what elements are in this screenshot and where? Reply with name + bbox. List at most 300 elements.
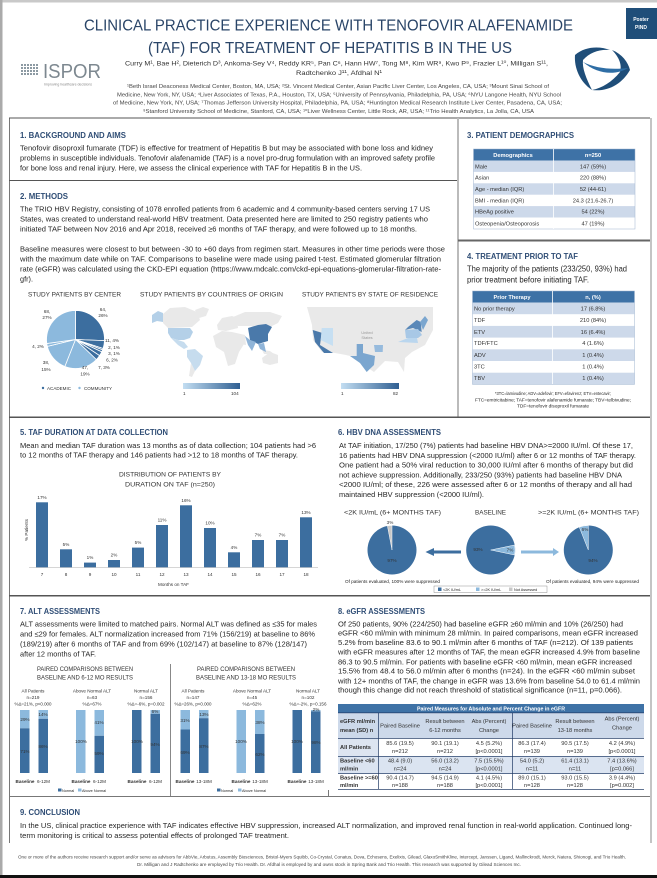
bar chart: baseline vs 6-12 months: PAIRED COMPARISONS BETWEEN (37, 666, 133, 673)
table: prior therapy: 1 (0.4%) (582, 364, 604, 370)
arrow: to right pie (521, 548, 559, 556)
authors: Radtchenko J¹¹, Afdhal N¹ (296, 70, 383, 77)
heading: 4. TREATMENT PRIOR TO TAF (467, 251, 578, 261)
bar chart: baseline vs 13-18 months: Normal ALT (296, 688, 320, 694)
table: paired eGFR measures: Abs (Percent) (472, 719, 506, 725)
pie chart: patients by center: 2, 1% (108, 345, 120, 350)
table: paired eGFR measures: [p=0.002] (610, 783, 634, 789)
bar chart: baseline vs 6-12 months: 6-12M (37, 779, 50, 784)
heading: 2. METHODS (20, 191, 68, 201)
table: paired eGFR measures: 54.0 (5.2) (520, 758, 544, 764)
affiliations: ⁹Stanford University School of Medicine, Stanford, CA, USA; ¹⁰Liver Wellness Center, Little Rock, AR, USA; ¹¹Trio Health Analytics, La Jolla, CA, USA (143, 108, 535, 115)
table: paired eGFR measures: 93.0 (15.5) (561, 776, 589, 782)
bar chart: baseline vs 6-12 months: 41% (94, 720, 104, 725)
pie chart: baseline: 7% (507, 548, 513, 552)
table: paired eGFR measures: n=11 (569, 766, 581, 772)
bar chart: baseline vs 13-18 months: 2% (313, 707, 319, 712)
bar chart: baseline vs 13-18 months: 100% (235, 739, 247, 744)
bar chart: baseline vs 13-18 months: 13-18M (196, 779, 212, 784)
map: state of residence: United (361, 330, 373, 335)
table: paired eGFR measures: 7.4 (13.6%) (607, 758, 637, 764)
text block: for bone loss and renal injury. Here, we assess the clinical experience with TAF for Hepatitis B in the US. (20, 164, 362, 172)
footnote (475, 391, 631, 408)
table: paired eGFR measures (338, 704, 644, 790)
bar chart: distribution by duration: 11 (136, 572, 141, 577)
pie chart: patients by center: 38, (43, 360, 49, 365)
table: paired eGFR measures: ml/min (340, 766, 359, 772)
pie chart: patients by center: 64, (100, 307, 106, 312)
affiliations (113, 84, 562, 115)
table: demographics: Asian (475, 176, 489, 182)
bar chart: baseline vs 13-18 months: %Δ=62% (242, 702, 262, 706)
map: state of residence: States (361, 335, 373, 340)
pie chart: baseline: BASELINE (475, 510, 506, 516)
table: paired eGFR measures: [p<0.0001] (608, 749, 636, 755)
table: demographics: Male (475, 164, 487, 170)
table: prior therapy: ETV (474, 330, 485, 336)
table: paired eGFR measures: n=188 (437, 783, 453, 789)
bar chart: distribution by duration: 10 (111, 572, 117, 577)
heading: 6. HBV DNA ASSESSMENTS (338, 427, 441, 437)
text block: maintained HBV suppression (<2000 IU/ml). (339, 490, 484, 499)
text block: Mean and median TAF duration was 13 months as of data collection; 104 patients had >6 (20, 441, 316, 450)
bar chart: baseline vs 13-18 months: Baseline (288, 779, 307, 784)
panel: eGFR assessments (337, 606, 644, 790)
pie chart: patients by center: 15% (41, 367, 51, 372)
map: state of residence: STUDY PATIENTS BY STATE OF RESIDENCE (302, 292, 438, 298)
bar chart: distribution by duration: 10% (205, 520, 215, 526)
bar chart: distribution by duration (24, 472, 318, 587)
text block: eGFR <60 ml/min with minimum 28 ml/min. In paired comparisons, mean eGFR increased (338, 628, 638, 638)
table: demographics: 47 (19%) (581, 222, 605, 228)
authors (125, 60, 548, 77)
pie chart: patients by center: 27% (42, 315, 52, 320)
pie chart: 2K or more after 6+ months (538, 510, 640, 584)
table: paired eGFR measures: n=188 (392, 783, 408, 789)
bar chart: distribution by duration: 7 (41, 572, 44, 577)
bar chart: baseline vs 13-18 months: Above Normal (242, 789, 266, 793)
bar chart: baseline vs 6-12 months: n=156 (140, 695, 153, 700)
table: demographics: 52 (44-61) (580, 187, 606, 193)
pie chart: patients by center: 11, 4% (105, 338, 119, 343)
pie chart: patients by center: 26% (98, 313, 108, 318)
footnote: TDF=tenofovir disoproxil fumarate (517, 404, 590, 408)
pie chart: patients by center (28, 292, 121, 391)
pie chart: 2K or more after 6+ months: >=2K IU/mL (6+ MONTHS TAF) (538, 510, 639, 516)
text block: problems in susceptible individuals. Tenofovir alafenamide (TAF) is a novel pro-drug formulation with an improved safety profile (20, 154, 435, 162)
map: countries of origin: STUDY PATIENTS BY COUNTRIES OF ORIGIN (140, 292, 283, 298)
bar chart: distribution by duration: 13 (183, 572, 189, 577)
icon: ISPOR logo: ISPOR (43, 61, 101, 83)
text block (467, 264, 627, 284)
text block: At TAF initiation, 17/250 (7%) patients had baseline HBV DNA>=2000 IU/ml. Of these 17, (339, 441, 633, 450)
bar chart: baseline vs 13-18 months: All Patients (182, 688, 205, 694)
bar chart: baseline vs 6-12 months: 14% (38, 712, 48, 717)
footer disclosures: One or more of the authors receive research support and/or serve as advisors for AbbVie, Arbutus, Assembly Biosciences, Bristol-Myers Squibb, Co-Crystal, Conatus, Dova, Echosens, Exelixis, Gilead, GlaxoSmithKline, Intercept, Janssen, Ligand, Mallinckrodt, Merck, Natera, Shionogi, and Trio Health. (18, 854, 626, 860)
text block: Baseline measures were closest to but between -30 to +60 days from regimen start. Measures in other time periods were those (20, 244, 445, 254)
text block (20, 821, 633, 840)
table: paired eGFR measures: 94.5 (14.9) (431, 776, 459, 782)
panel: ALT assessments (14, 606, 327, 793)
bar chart: baseline vs 6-12 months: Baseline (16, 779, 35, 784)
table: paired eGFR measures: Baseline >=60 (340, 776, 378, 782)
panel: conclusion (20, 807, 633, 840)
table: paired eGFR measures: n=139 (524, 749, 540, 755)
table: paired eGFR measures: 7.5 (15.5%) (474, 758, 504, 764)
bar chart: baseline vs 13-18 months: PAIRED COMPARISONS BETWEEN (197, 666, 295, 673)
bar chart: baseline vs 13-18 months: BASELINE AND 13-18 MO RESULTS (196, 674, 296, 682)
affiliations: Medicine, New York, NY, USA; ⁴Liver Associates of Texas, P.A., Houston, TX, USA; ⁵University of Pennsylvania, Philadelphia, PA, USA; ⁶NYU Langone Health, NYU School (117, 92, 561, 98)
table: paired eGFR measures: 3.9 (4.4%) (609, 776, 635, 782)
table: paired eGFR measures: 4.5 (5.2%) (476, 741, 502, 747)
bar chart: distribution by duration: Months on TAF (158, 582, 189, 587)
text block: with the maximum date while on TAF. Comparisons to baseline were made using paired t-test. Estimated glomerular filtration (19, 254, 441, 264)
bar chart: baseline vs 6-12 months: 6% (152, 709, 158, 714)
table: demographics: 54 (22%) (581, 210, 605, 216)
panel: background and aims (20, 130, 435, 172)
footer disclosures (18, 854, 626, 867)
map: state of residence: 1 (341, 391, 344, 396)
bar chart: baseline vs 13-18 months: n=147 (187, 695, 200, 700)
text block: 86.3 to 90.5 ml/min. For patients with baseline eGFR <60 ml/min, mean eGFR increased (338, 658, 632, 666)
bar chart: distribution by duration: 17% (37, 495, 47, 500)
map: countries of origin (140, 292, 283, 396)
bar chart: baseline vs 13-18 months: Baseline (232, 779, 251, 784)
bar chart: baseline vs 13-18 months: Normal (221, 789, 233, 793)
text block (20, 144, 435, 172)
pie chart: 2K or more after 6+ months: 6% (582, 527, 588, 532)
bar chart: distribution by duration: % Patients (24, 518, 29, 541)
table: demographics: Age - median (IQR) (475, 187, 524, 193)
table: prior therapy: 210 (84%) (580, 318, 606, 324)
table: paired eGFR measures: n=128 (567, 783, 583, 789)
bar chart: baseline vs 6-12 months: Normal (62, 789, 74, 793)
text block: 15.5% from 48.4 to 56.0 ml/min after 6 months (n=24). In the eGFR <60 ml/min subset (338, 666, 635, 676)
bar chart: distribution by duration: 16 (255, 572, 261, 577)
text block: ALT assessments were limited to matched pairs. Normal ALT was defined as ≤35 for males (20, 620, 317, 628)
bar chart: baseline vs 6-12 months: Baseline (128, 779, 147, 784)
table: paired eGFR measures: Paired Baseline (512, 724, 552, 730)
bar chart: distribution by duration: 18 (303, 572, 309, 577)
bar chart: distribution by duration: 12 (159, 572, 165, 577)
map: state of residence (302, 292, 438, 396)
table: paired eGFR measures: [p<0.0001] (475, 783, 503, 789)
table: paired eGFR measures: Paired Measures for Absolute and Percent Change in eGFR (417, 706, 565, 712)
text block: In the US, clinical practice experience with TAF indicates effective HBV suppression, increased ALT normalization, and improved renal function in real-world application. Continued long- (20, 821, 633, 830)
table: prior therapy: 3TC (474, 364, 485, 370)
table: paired eGFR measures: Change (479, 728, 499, 734)
title: (TAF) FOR TREATMENT OF HEPATITIS B IN THE US (148, 40, 512, 57)
title (84, 18, 573, 57)
table: paired eGFR measures: 90.5 (17.5) (561, 741, 589, 747)
table: paired eGFR measures: 89.0 (15.1) (518, 776, 546, 782)
bar chart: baseline vs 13-18 months: %Δ=26%, p<0.000 (174, 702, 212, 706)
table: paired eGFR measures: Result between (425, 719, 465, 725)
table: paired eGFR measures: 85.6 (19.5) (386, 741, 414, 747)
poster badge (626, 8, 657, 39)
footnote: FTC=emtricitabine; TAF=tenofovir alafenamide fumarate; TBV=telbivudine; (475, 398, 631, 402)
text block: 16 patients had HBV DNA suppression (<2000 IU/ml) after 6 or 12 months of TAF therapy. (339, 451, 636, 460)
bar chart: distribution by duration: DISTRIBUTION OF PATIENTS BY (119, 472, 221, 478)
pie chart: patients by center: 7, 3% (98, 365, 110, 370)
bar chart: baseline vs 6-12 months: 100% (131, 739, 143, 744)
table: demographics: 24.3 (21.6-26.7) (573, 198, 613, 204)
poster badge: PIND (635, 25, 647, 31)
table: paired eGFR measures: Change (612, 726, 632, 732)
bar chart: baseline vs 6-12 months: Above Normal (82, 789, 106, 793)
text block (337, 620, 640, 694)
table: prior therapy: 4 (1.6%) (582, 341, 604, 347)
bar chart: baseline vs 6-12 months: %Δ=67% (82, 702, 102, 706)
bar chart: distribution by duration: 16% (181, 498, 191, 503)
text block: after 12 months of TAF. (20, 650, 96, 658)
legend (434, 586, 547, 592)
text block: term monitoring is critical to assess potential effects of prolonged TAF treatment. (20, 831, 289, 840)
bar chart: baseline vs 6-12 months: 29% (20, 717, 30, 722)
bar chart: distribution by duration: 11% (158, 518, 166, 522)
table: prior therapy: 1 (0.4%) (582, 353, 604, 359)
table: paired eGFR measures: n=24 (439, 766, 451, 772)
legend: Not Assessed (514, 588, 537, 592)
bar chart: distribution by duration: 15 (231, 572, 237, 577)
pie chart: patients by center: 4, 2% (32, 344, 44, 349)
pie chart: patients by center: COMMUNITY (84, 386, 112, 391)
text block: gfr). (20, 274, 33, 284)
heading: 8. eGFR ASSESSMENTS (338, 606, 425, 616)
table: paired eGFR measures: 86.3 (17.4) (518, 741, 546, 747)
bar chart: baseline vs 13-18 months: Above Normal ALT (233, 688, 271, 694)
bar chart: distribution by duration: 17 (279, 572, 285, 577)
bar chart: baseline vs 13-18 months: 13% (199, 712, 209, 717)
table: paired eGFR measures: eGFR ml/min (340, 719, 376, 725)
table: prior therapy: n, (%) (585, 295, 601, 301)
map: state of residence: 82 (393, 391, 399, 396)
pie chart: patients by center: 47, (82, 365, 88, 370)
bar chart: baseline vs 6-12 months: 6-12M (149, 779, 162, 784)
pie chart: 2K or more after 6+ months: Of patients evaluated, 94% were suppressed (546, 579, 640, 584)
text block: prior treatment before initiating TAF. (467, 276, 589, 284)
pie chart: under 2K after 6+ months (344, 510, 441, 584)
text block: States, was created to understand real-world HBV treatment. Data presented here are limited to 250 registry patients who (20, 214, 428, 224)
text block: The TRIO HBV Registry, consisting of 1078 enrolled patients from 6 academic and 4 community-based centers serving 17 US (20, 204, 430, 214)
table: paired eGFR measures: 61.4 (13.1) (561, 758, 589, 764)
bar chart: baseline vs 6-12 months: %Δ=21%, p<0.000 (14, 702, 52, 706)
bar chart: distribution by duration: 8 (65, 572, 68, 577)
heading: 9. CONCLUSION (20, 807, 80, 817)
table: paired eGFR measures: 48.4 (9.0) (388, 758, 412, 764)
text block: <2000 IU/ml; of these, 226 were assessed after 6 or 12 months of therapy and all had (339, 480, 632, 489)
bar chart: baseline vs 13-18 months: 100% (291, 739, 303, 744)
text block (20, 620, 317, 658)
bar chart: baseline vs 13-18 months: Baseline (176, 779, 195, 784)
bar chart: baseline vs 6-12 months (14, 666, 165, 793)
heading: 1. BACKGROUND AND AIMS (20, 130, 126, 140)
bar chart: distribution by duration: DURATION ON TAF (n=250) (125, 482, 215, 488)
panel: treatment prior to TAF (467, 251, 634, 408)
panel: TAF duration (20, 427, 318, 587)
table: demographics: 147 (59%) (580, 164, 606, 170)
table: paired eGFR measures: [p=0.066] (610, 766, 634, 772)
icon: ISPOR logo: Improving healthcare decisions (44, 82, 92, 86)
legend: >=2K IU/mL (481, 588, 501, 592)
bar chart: baseline vs 6-12 months: 100% (75, 739, 87, 744)
bar chart: distribution by duration: 13% (301, 510, 311, 515)
icon: swoosh logo (575, 47, 630, 90)
bar chart: baseline vs 6-12 months: Above Normal ALT (73, 688, 111, 694)
table: paired eGFR measures: 4.1 (4.5%) (476, 776, 502, 782)
bar chart: distribution by duration: 7% (279, 532, 285, 538)
pie chart: patients by center: STUDY PATIENTS BY CENTER (28, 292, 121, 298)
heading: 7. ALT ASSESSMENTS (20, 606, 100, 616)
table: prior therapy: Prior Therapy (494, 295, 531, 301)
bar chart: baseline vs 6-12 months: n=219 (27, 695, 40, 700)
pie chart: under 2K after 6+ months: 97% (387, 558, 397, 563)
pie chart: under 2K after 6+ months: 3% (387, 520, 393, 525)
table: paired eGFR measures: n=24 (394, 766, 406, 772)
bar chart: baseline vs 13-18 months: 38% (255, 720, 265, 725)
table: prior therapy: TBV (474, 376, 485, 382)
bar chart: baseline vs 13-18 months (174, 666, 327, 793)
table: paired eGFR measures: Result between (555, 719, 595, 725)
text block: not achieve suppression. Additionally, 233/250 (93%) patients had baseline HBV DNA (339, 470, 622, 480)
text block: with 12+ months of TAF, the change in eGFR was 13.6% from baseline 54.0 to 61.4 ml/min (337, 676, 640, 686)
bar chart: baseline vs 13-18 months: 87% (199, 744, 209, 749)
text block: with eGFR measures after 12 months of TAF, the mean eGFR increased 4.9% from baseline (337, 648, 640, 656)
bar chart: baseline vs 13-18 months: 13-18M (308, 779, 324, 784)
table: paired eGFR measures: n=212 (392, 749, 408, 755)
table: prior therapy: No prior therapy (474, 306, 515, 312)
bar chart: baseline vs 6-12 months: 59% (94, 751, 104, 756)
bar chart: distribution by duration: 1% (87, 555, 93, 560)
table: demographics: HBeAg positive (475, 210, 514, 216)
text block: rate (eGFR) was calculated using the CKD-EPI equation (https://www.mdcalc.com/ckd-epi-equations-glomerular-filtration-rate- (20, 264, 442, 274)
pie chart: baseline: 93% (473, 547, 483, 552)
bar chart: baseline vs 6-12 months: n=63 (87, 695, 98, 700)
bar chart: baseline vs 13-18 months: 62% (255, 752, 265, 757)
pie chart: patients by center: 68, (44, 309, 50, 314)
authors: Curry M¹, Bae H², Dieterich D³, Ankoma-Sey V⁴, Reddy KR⁵, Pan C⁶, Hann HW⁷, Tong M⁸, Kim WR⁹, Kwo P⁹, Frazier L¹⁰, Milligan S¹¹, (125, 60, 548, 68)
footnote: *3TC=lamivudine; ADV=adefovir; EFV=efavirenz; ETV=entecavir; (495, 391, 611, 396)
pie chart: patients by center: 19% (80, 372, 90, 376)
table: prior therapy: TDF (474, 318, 486, 324)
heading: 5. TAF DURATION AT DATA COLLECTION (20, 427, 168, 437)
pie chart: patients by center: 6, 2% (106, 358, 118, 362)
table: demographics: n=250 (585, 153, 601, 159)
bar chart: baseline vs 6-12 months: 94% (150, 742, 160, 747)
table: paired eGFR measures: 56.0 (13.2) (431, 758, 459, 764)
text block (339, 441, 636, 499)
table: prior therapy (472, 291, 634, 384)
bar chart: distribution by duration: 4% (231, 545, 237, 550)
map: countries of origin: 1 (183, 391, 186, 396)
bar chart: baseline vs 13-18 months: %Δ=-2%, p=0.156 (290, 702, 327, 706)
affiliations: of Medicine, New York, NY, USA; ⁷Thomas Jefferson University Hospital, Philadelphia, PA, USA; ⁸Huntington Medical Research Institute Liver Center, Pasadena, CA, USA; (113, 100, 562, 106)
panel: HBV DNA assessments (338, 427, 640, 592)
header (21, 8, 657, 115)
table: demographics (474, 149, 635, 229)
table: paired eGFR measures: 90.4 (14.7) (386, 776, 414, 782)
table: paired eGFR measures: 13-18 months (558, 728, 593, 734)
bar chart: baseline vs 13-18 months: 13-18M (252, 779, 268, 784)
table: paired eGFR measures: Abs (Percent) (605, 716, 639, 722)
table: demographics: Demographics (493, 153, 533, 159)
poster badge: Poster (633, 17, 649, 23)
pie chart: under 2K after 6+ months: <2K IU/mL (6+ MONTHS TAF) (344, 510, 441, 516)
bar chart: baseline vs 6-12 months: 6-12M (93, 779, 106, 784)
text block: The majority of the patients (233/250, 93%) had (467, 264, 627, 274)
pie chart: 2K or more after 6+ months: 94% (588, 558, 598, 563)
text block: Tenofovir disoproxil fumarate (TDF) is effective for treatment of Hepatitis B but may be associated with bone loss and kidney (20, 144, 433, 152)
table: paired eGFR measures: n=139 (567, 749, 583, 755)
table: paired eGFR measures: n=11 (526, 766, 538, 772)
table: paired eGFR measures: All Patients (340, 745, 371, 751)
text block: to 12 months of TAF therapy and 146 patients had >12 to 18 months of TAF therapy. (20, 450, 298, 460)
map: countries of origin: 104 (231, 391, 239, 396)
table: paired eGFR measures: Baseline <60 (340, 758, 375, 764)
panel: methods (19, 191, 445, 396)
pie chart: baseline (466, 510, 515, 574)
table: prior therapy: 1 (0.4%) (582, 376, 604, 382)
table: paired eGFR measures: n=212 (437, 749, 453, 755)
pie chart: under 2K after 6+ months: Of patients evaluated, 100% were suppressed (345, 579, 441, 584)
bar chart: baseline vs 13-18 months: 69% (180, 750, 190, 755)
text block: Of 250 patients, 90% (224/250) had baseline eGFR ≥60 ml/min and 10% (26/250) had (338, 620, 623, 628)
bar chart: distribution by duration: 2% (111, 552, 117, 558)
icon: ISPOR logo (21, 61, 101, 86)
text block (20, 441, 316, 460)
bar chart: distribution by duration: 5% (63, 542, 69, 547)
text block: 5.2% from baseline 83.6 to 90.1 ml/min after 6 months of TAF (n=212). Of 139 patients (338, 638, 633, 647)
text block: though this change did not reach threshold of statistical significance (n=11, p=0.066). (338, 686, 622, 694)
table: paired eGFR measures: ml/min (340, 783, 359, 789)
text block (19, 204, 445, 284)
bar chart: baseline vs 13-18 months: n=45 (247, 695, 258, 700)
text block: initiated TAF between Nov 2016 and Apr 2018, received ≥6 months of TAF therapy, and were followed up to 18 months. (20, 224, 417, 234)
bar chart: distribution by duration: 7% (255, 532, 261, 538)
table: paired eGFR measures: n=128 (524, 783, 540, 789)
table: demographics: BMI - median (IQR) (475, 198, 524, 204)
bar chart: distribution by duration: 14 (207, 572, 213, 577)
affiliations: ¹Beth Israel Deaconess Medical Center, Boston, MA, USA; ²St. Vincent Medical Center, Asian Pacific Liver Center, Los Angeles, CA, USA; ³Mount Sinai School of (127, 84, 550, 90)
table: prior therapy: 17 (6.8%) (581, 306, 605, 312)
table: paired eGFR measures: Paired Baseline (380, 724, 420, 730)
text block: One patient had a 50% viral reduction to 30,000 IU/ml after 6 months of therapy but did (339, 460, 633, 470)
bar chart: baseline vs 6-12 months: 86% (38, 744, 48, 749)
bar chart: distribution by duration: 9 (89, 572, 92, 577)
bar chart: baseline vs 6-12 months: 71% (20, 749, 30, 754)
table: paired eGFR measures: mean (SD) n (340, 728, 374, 734)
text block: (189/219) after 6 months of TAF and from 69% (102/147) at baseline to 87% (128/147) (20, 640, 307, 648)
bar chart: baseline vs 6-12 months: BASELINE AND 6-12 MO RESULTS (37, 674, 133, 682)
bar chart: baseline vs 13-18 months: n=102 (302, 695, 315, 700)
bar chart: distribution by duration: 5% (135, 540, 141, 545)
text block: and ≤29 for females. ALT normalization increased from 71% (156/219) at baseline to 86% (20, 630, 316, 638)
table: paired eGFR measures: 6-12 months (429, 728, 461, 734)
table: paired eGFR measures: 4.2 (4.9%) (609, 741, 635, 747)
bar chart: baseline vs 13-18 months: 98% (311, 740, 321, 745)
table: demographics: Osteopenia/Osteoporosis (475, 222, 539, 228)
bar chart: baseline vs 6-12 months: Normal ALT (134, 688, 158, 694)
panel: patient demographics (467, 130, 635, 229)
table: paired eGFR measures: 90.1 (19.1) (431, 741, 459, 747)
bar chart: baseline vs 13-18 months: 31% (180, 718, 190, 723)
table: prior therapy: 16 (6.4%) (581, 330, 605, 336)
heading: 3. PATIENT DEMOGRAPHICS (467, 130, 574, 140)
legend: <2K IU/mL (443, 588, 461, 592)
title: CLINICAL PRACTICE EXPERIENCE WITH TENOFOVIR ALAFENAMIDE (84, 18, 573, 34)
table: paired eGFR measures: [p<0.0001] (475, 766, 503, 772)
table: prior therapy: TDF/FTC (474, 341, 498, 347)
